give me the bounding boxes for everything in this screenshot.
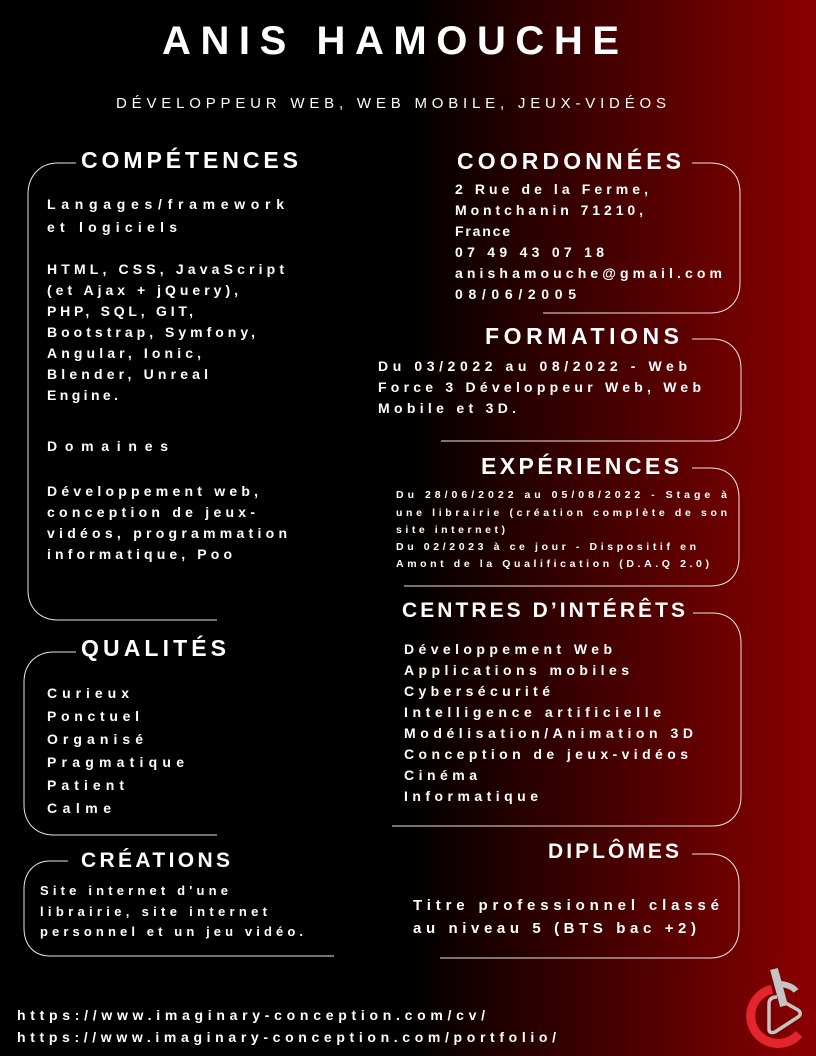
panel: coordonnées (455, 147, 740, 313)
panel: compétences (28, 146, 298, 620)
text: créations (40, 883, 303, 939)
list: qualités: Organisé (47, 731, 143, 747)
heading: coordonnées: COORDONNÉES (457, 147, 681, 174)
text: langages et logiciels: (et Ajax + jQuery), (47, 282, 238, 298)
list: qualités (47, 685, 184, 816)
text: domaines: Domaines (47, 438, 168, 454)
text: expériences: Du 28/06/2022 au 05/08/2022 - Stage à (396, 489, 727, 501)
icon: logo (751, 969, 800, 1043)
text: coordonnées: Montchanin 71210, (455, 202, 643, 218)
heading: créations: CRÉATIONS (81, 849, 230, 872)
text: langages et logiciels: Engine. (47, 387, 118, 403)
text: langages et logiciels: HTML, CSS, JavaScript (47, 261, 284, 277)
list: centres d'intérêts (404, 641, 693, 804)
text: expériences: site internet) (396, 524, 505, 536)
text: coordonnées: anishamouche@gmail.com (455, 265, 722, 281)
heading: diplômes: DIPLÔMES (548, 839, 679, 863)
text: créations: librairie, site internet (40, 904, 268, 919)
text: domaines: Développement web, (47, 483, 258, 499)
panel: expériences (396, 452, 739, 586)
text: formations: Du 03/2022 au 08/2022 - Web (378, 358, 687, 374)
text: langages et logiciels: Blender, Unreal (47, 366, 208, 382)
list: centres d'intérêts: Applications mobiles (404, 662, 629, 678)
text: créations: personnel et un jeu vidéo. (40, 924, 303, 939)
text: coordonnées: 08/06/2005 (455, 286, 576, 302)
text: expériences: Amont de la Qualification (D.A.Q 2.0) (396, 558, 709, 570)
heading: qualités: QUALITÉS (81, 634, 226, 661)
text: langages et logiciels: Bootstrap, Symfony, (47, 324, 255, 340)
list: qualités: Pragmatique (47, 754, 184, 770)
text: langages et logiciels (47, 196, 284, 403)
list: qualités: Calme (47, 800, 111, 816)
list: centres d'intérêts: Informatique (404, 788, 538, 804)
text: expériences: Du 02/2023 à ce jour - Dispositif en (396, 541, 696, 553)
text: domaines: conception de jeux- (47, 504, 255, 520)
heading: compétences: COMPÉTENCES (81, 146, 298, 173)
panel: centres d'intérêts (392, 598, 741, 826)
text: domaines (47, 438, 287, 562)
heading: expériences: EXPÉRIENCES (481, 452, 679, 479)
list: centres d'intérêts: Conception de jeux-vidéos (404, 746, 688, 762)
text: langages et logiciels: Langages/framework (47, 196, 284, 212)
panel: diplômes (413, 839, 739, 958)
text: coordonnées: 07 49 43 07 18 (455, 244, 604, 260)
links (17, 1007, 556, 1045)
text: diplômes: Titre professionnel classé (413, 897, 719, 914)
text: coordonnées: 2 Rue de la Ferme, (455, 181, 648, 197)
text: domaines: informatique, Poo (47, 546, 232, 562)
text: formations (378, 358, 701, 416)
text: formations: Mobile et 3D. (378, 400, 516, 416)
text: diplômes: au niveau 5 (BTS bac +2) (413, 920, 696, 937)
subtitle: DÉVELOPPEUR WEB, WEB MOBILE, JEUX-VIDÉOS (116, 95, 666, 112)
panel: créations (24, 849, 334, 956)
text: formations: Force 3 Développeur Web, Web (378, 379, 701, 395)
list: qualités: Patient (47, 777, 124, 793)
list: centres d'intérêts: Cybersécurité (404, 683, 550, 699)
panel: formations (378, 323, 741, 441)
text: domaines: vidéos, programmation (47, 525, 287, 541)
links: https://www.imaginary-conception.com/portfolio/ (17, 1029, 556, 1045)
text: coordonnées (455, 181, 722, 302)
text: expériences: une librairie (création complète de son (396, 507, 727, 519)
list: centres d'intérêts: Modélisation/Animation 3D (404, 725, 693, 741)
text: langages et logiciels: et logiciels (47, 219, 177, 235)
list: qualités: Ponctuel (47, 708, 139, 724)
list: centres d'intérêts: Développement Web (404, 641, 612, 657)
text: créations: Site internet d'une (40, 883, 228, 898)
list: qualités: Curieux (47, 685, 129, 701)
heading: formations: FORMATIONS (485, 323, 679, 349)
text: coordonnées: France (455, 223, 510, 239)
links: https://www.imaginary-conception.com/cv/ (17, 1007, 485, 1023)
panel: qualités (24, 634, 226, 835)
title: ANIS HAMOUCHE (162, 19, 619, 63)
list: centres d'intérêts: Cinéma (404, 767, 477, 783)
heading: centres d'intérêts: CENTRES D’INTÉRÊTS (402, 598, 685, 622)
text: expériences (396, 489, 727, 570)
text: diplômes (413, 897, 719, 937)
list: centres d'intérêts: Intelligence artificielle (404, 704, 661, 720)
text: langages et logiciels: Angular, Ionic, (47, 345, 201, 361)
text: langages et logiciels: PHP, SQL, GIT, (47, 303, 193, 319)
